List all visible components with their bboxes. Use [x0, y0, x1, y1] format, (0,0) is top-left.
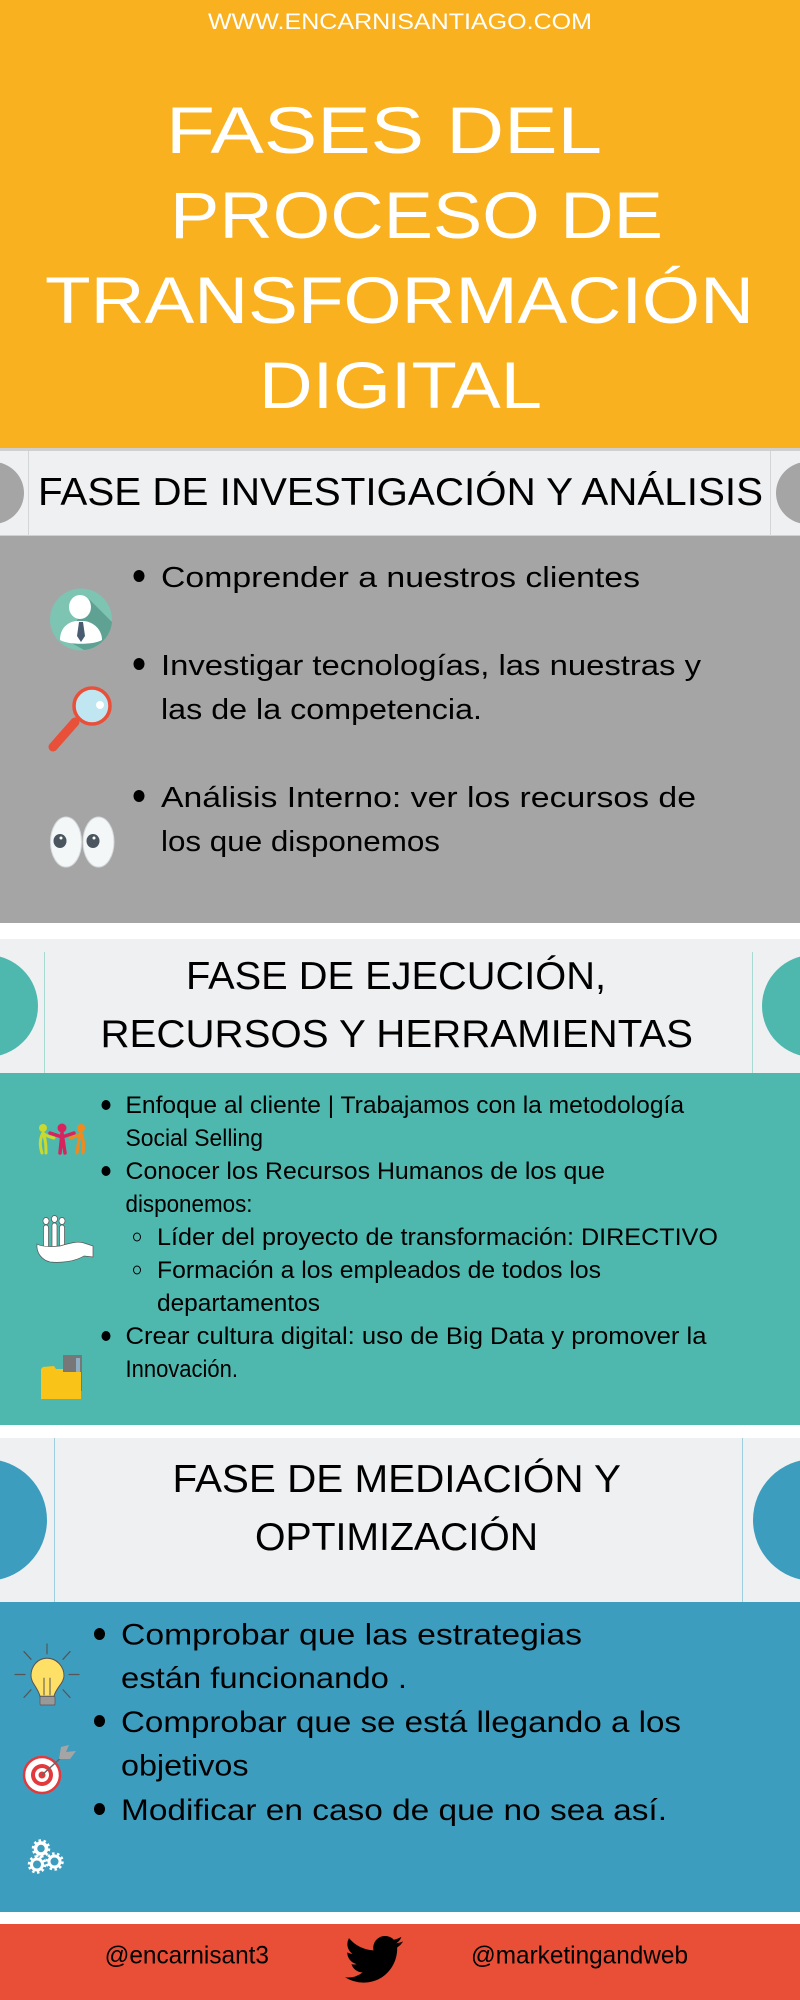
heading: fase 2: RECURSOS Y HERRAMIENTAS [100, 1013, 693, 1056]
heading: fase 3 [172, 1458, 621, 1559]
icon: person [50, 588, 112, 650]
icon: eyes [50, 817, 114, 867]
bullet list: fase 2: Social Selling [126, 1125, 263, 1152]
bullet list: fase 2 [102, 1092, 718, 1383]
bullet list: fase 2: Conocer los Recursos Humanos de los que [126, 1158, 605, 1185]
bullet list: fase 1: Análisis Interno: ver los recursos de [161, 782, 696, 814]
bullet list: fase 3: Comprobar que se está llegando a los [121, 1706, 681, 1739]
bullet list: fase 2: Enfoque al cliente | Trabajamos con la metodología [126, 1092, 685, 1119]
icon: target with arrow [24, 1745, 76, 1793]
twitter handle left: @encarnisant3 [105, 1942, 269, 1970]
panel: title banner [0, 0, 800, 448]
bullet list: fase 2: disponemos: [126, 1191, 252, 1218]
bullet list: fase 2: Formación a los empleados de todos los [157, 1257, 601, 1284]
bullet list: fase 3: Modificar en caso de que no sea así. [121, 1794, 667, 1827]
heading: fase 2 [100, 955, 693, 1056]
icon: team of people [39, 1124, 85, 1153]
heading: fase 3: OPTIMIZACIÓN [255, 1516, 538, 1559]
icon: light bulb [15, 1644, 79, 1705]
icon: hand holding people [37, 1216, 93, 1262]
title: PROCESO DE [170, 178, 663, 252]
icon: magnifying glass [53, 688, 110, 747]
website url: WWW.ENCARNISANTIAGO.COM [208, 9, 592, 34]
panel: footer [0, 1924, 800, 2000]
title: TRANSFORMACIÓN [45, 263, 754, 337]
bullet list: fase 2: departamentos [157, 1290, 320, 1317]
title [45, 93, 754, 422]
title: DIGITAL [259, 348, 542, 422]
icon: twitter bird [345, 1936, 403, 1983]
panel: fase de investigación y análisis [0, 448, 800, 923]
twitter handle right: @marketingandweb [471, 1942, 688, 1970]
bullet list: fase 1: Comprender a nuestros clientes [161, 562, 640, 594]
bullet list: fase 2: Crear cultura digital: uso de Big Data y promover la [126, 1323, 707, 1350]
bullet list: fase 3: objetivos [121, 1750, 248, 1782]
bullet list: fase 1: Investigar tecnologías, las nuestras y [161, 650, 702, 682]
bullet list: fase 1 [134, 562, 702, 858]
bullet list: fase 3 [94, 1618, 681, 1827]
heading: fase 2: FASE DE EJECUCIÓN, [186, 955, 606, 998]
bullet list: fase 2: Líder del proyecto de transformación: DIRECTIVO [157, 1224, 718, 1251]
icon: folder and server [41, 1355, 82, 1399]
bullet list: fase 3: Comprobar que las estrategias [121, 1618, 582, 1652]
heading: fase 1: FASE DE INVESTIGACIÓN Y ANÁLISIS [38, 471, 763, 514]
panel: fase de mediación y optimización [0, 1438, 800, 1912]
bullet list: fase 1: los que disponemos [161, 826, 440, 858]
icon: gears [29, 1840, 62, 1872]
heading: fase 3: FASE DE MEDIACIÓN Y [172, 1458, 621, 1501]
bullet list: fase 2: Innovación. [126, 1356, 238, 1383]
panel: fase de ejecución [0, 939, 800, 1425]
bullet list: fase 3: están funcionando . [121, 1662, 407, 1695]
bullet list: fase 1: las de la competencia. [161, 694, 482, 726]
title: FASES DEL [166, 93, 602, 167]
